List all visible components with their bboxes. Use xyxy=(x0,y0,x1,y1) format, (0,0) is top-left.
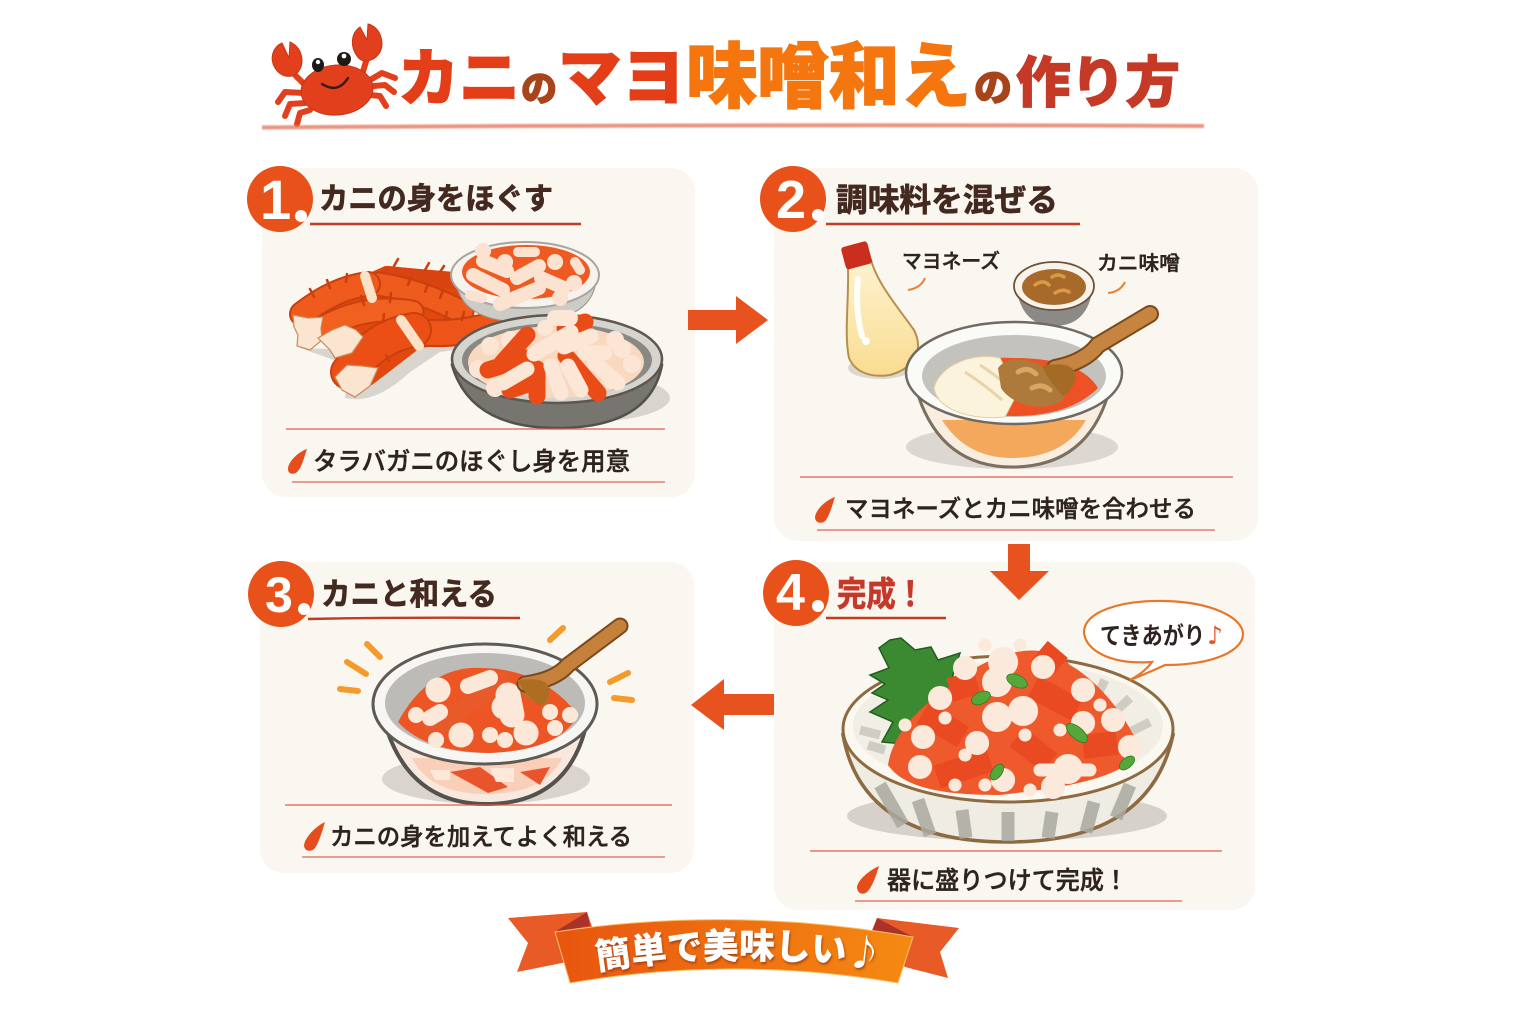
illustration: small bowl of crab meat xyxy=(451,242,599,322)
speech bubble: ♪ xyxy=(1207,621,1223,650)
illustration: finished dish xyxy=(843,638,1173,842)
illustration: crab miso dish xyxy=(1014,262,1094,326)
illustration: sparkle marks xyxy=(340,628,632,700)
step 3 badge xyxy=(248,561,314,627)
title text: の: の xyxy=(521,60,557,112)
step 4 heading: 完成！ xyxy=(837,567,925,616)
title text: の: の xyxy=(974,57,1012,112)
label: mayonnaise: マヨネーズ xyxy=(902,245,1000,274)
panel: step 4 xyxy=(763,560,1255,910)
title text: マヨ: マヨ xyxy=(558,27,685,119)
title text: 作り方: 作り方 xyxy=(1016,38,1180,118)
step 1 badge: 1 xyxy=(260,168,291,231)
speech bubble xyxy=(1084,601,1243,680)
step 2 badge xyxy=(760,166,826,232)
illustration: mixing bowl xyxy=(906,314,1150,469)
title text: カニ: カニ xyxy=(398,28,520,118)
illustration: crab legs xyxy=(293,259,490,399)
step 3 caption: カニの身を加えてよく和える xyxy=(330,817,632,852)
speech bubble: てきあがり xyxy=(1100,616,1205,651)
step 3 heading: カニと和える xyxy=(321,569,497,614)
illustration: mayonnaise bottle xyxy=(841,241,918,379)
title text: 味噌和え: 味噌和え xyxy=(686,18,971,123)
step 4 badge xyxy=(763,560,829,626)
title xyxy=(262,18,1204,128)
label: mayonnaise xyxy=(902,245,1000,290)
title underline xyxy=(262,125,1204,128)
banner text: 簡単で美味しい♪ xyxy=(594,928,876,976)
banner ribbon xyxy=(508,912,959,984)
step 4 caption: 器に盛りつけて完成！ xyxy=(887,861,1128,897)
arrow: step 1 to step 2 xyxy=(688,296,768,344)
illustration: large bowl of crab meat xyxy=(452,315,670,428)
step 3 badge: 3 xyxy=(265,567,293,623)
step 1 caption: タラバガニのほぐし身を用意 xyxy=(313,442,630,478)
step 4 badge: 4 xyxy=(776,564,805,622)
icon: crab mascot xyxy=(272,24,395,124)
step 1 heading: カニの身をほぐす xyxy=(319,174,553,218)
arrow: step 4 to step 3 xyxy=(691,679,776,730)
step 1 badge xyxy=(247,166,313,232)
label: crab miso xyxy=(1097,247,1180,293)
illustration: bowl with crab mixture xyxy=(373,626,620,804)
panel: step 3 xyxy=(248,561,694,873)
label: crab miso: カニ味噌 xyxy=(1097,247,1180,276)
step 2 badge: 2 xyxy=(776,170,806,230)
arrow: step 2 to step 4 xyxy=(990,544,1049,600)
step 2 caption: マヨネーズとカニ味噌を合わせる xyxy=(845,489,1196,524)
step 2 heading: 調味料を混ぜる xyxy=(836,175,1058,221)
panel: step 2 xyxy=(760,166,1258,541)
panel: step 1 xyxy=(247,166,695,497)
